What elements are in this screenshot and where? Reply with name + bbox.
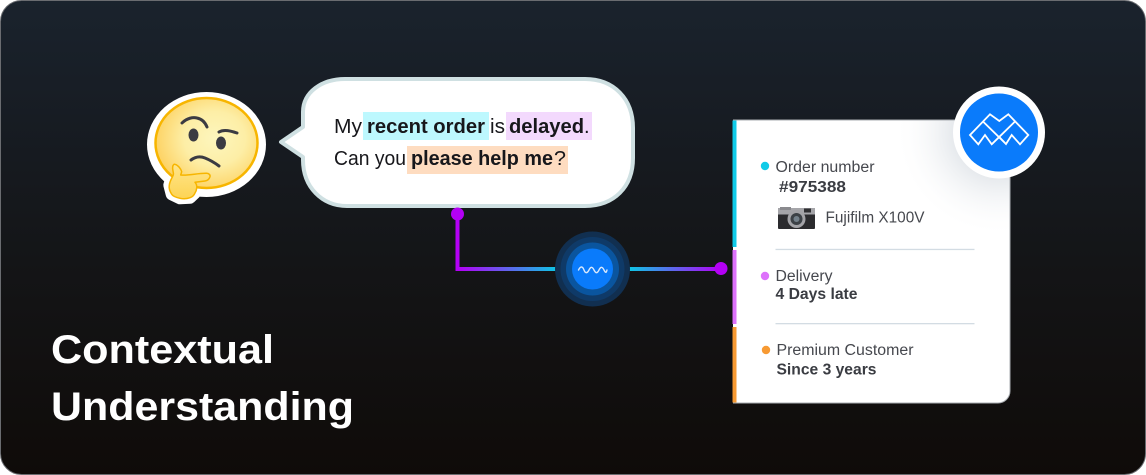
title: Understanding (51, 385, 354, 429)
panel: customer context card (732, 120, 1010, 403)
bubble message text: delayed (509, 116, 584, 138)
bubble message text: recent order (367, 116, 485, 138)
connector: pulse to card (628, 262, 728, 275)
eyes (188, 128, 198, 142)
card section: order number: Order number (776, 159, 874, 176)
card section: order number (761, 159, 874, 196)
icon: camera (778, 207, 815, 229)
bubble message text: ? (554, 148, 566, 170)
card color bars (732, 120, 736, 402)
bubble message text: . (584, 116, 590, 138)
card section: order number: #975388 (779, 179, 846, 196)
eyebrows (182, 118, 207, 127)
card section: premium customer: Since 3 years (776, 362, 876, 378)
card section: delivery: 4 Days late (776, 286, 858, 303)
product name: Fujifilm X100V (826, 210, 925, 226)
icon: thinking emoji (147, 92, 266, 199)
bubble message text: is (490, 116, 505, 138)
bubble message text: Can you (334, 148, 406, 170)
card section: premium customer: Premium Customer (776, 342, 914, 359)
card section: delivery: Delivery (776, 268, 833, 285)
icon: pulse node (555, 232, 630, 306)
card section: premium customer (762, 342, 914, 378)
card section: delivery (761, 268, 858, 303)
icon: brand badge (953, 86, 1045, 178)
title (51, 328, 354, 429)
hand (169, 164, 210, 199)
bubble message text (334, 116, 590, 170)
highlight: please help me (407, 146, 568, 174)
bubble message text: please help me (411, 148, 553, 170)
title: Contextual (51, 328, 274, 372)
speech bubble (281, 79, 633, 206)
highlight: delayed (506, 112, 592, 140)
bubble message text: My (334, 116, 362, 138)
mouth (191, 157, 219, 166)
connector: bubble to pulse (451, 208, 556, 269)
highlight: recent order (363, 112, 489, 140)
